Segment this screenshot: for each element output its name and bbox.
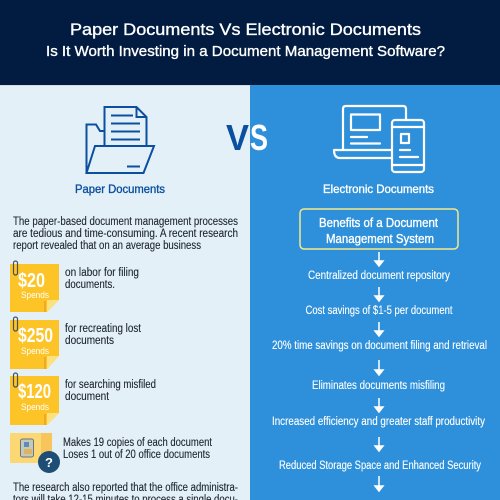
arrow 5 [375,398,383,412]
icon: paperclip [14,261,18,275]
sticky note: $20: Spends [21,290,49,300]
text: searching cost [65,379,156,403]
sticky note: $120: $120 [18,381,51,403]
callout: benefits: Benefits of a Document [319,215,438,230]
callout: benefits: Management System [326,231,434,246]
vs badge [226,117,268,158]
arrow 7 [375,476,383,491]
arrow 4 [375,360,383,375]
heading: paper documents: Paper Documents [75,182,165,196]
title: Paper Documents Vs Electronic Documents [70,20,421,39]
text: labor cost: on labor for filing [65,267,139,279]
callout: benefits [300,209,458,249]
benefit: cost savings: Cost savings of $1-5 per document [306,305,453,317]
sticky note: $20: $20 [18,270,45,292]
text: recreating cost: for recreating lost [65,323,142,335]
icon: document with question mark: ? [45,455,53,470]
vs badge: S [250,117,268,158]
text: recreating cost [65,323,142,347]
benefit: misfiling: Eliminates documents misfiling [312,380,445,392]
icon: document with question mark [10,433,60,473]
header banner [0,0,500,85]
text: copies and losses: Loses 1 out of 20 office documents [63,449,210,461]
arrow 3 [375,322,383,336]
text: recreating cost: documents [65,335,114,347]
panel: paper documents [0,85,250,500]
text: searching cost: document [65,391,110,403]
icon: paperclip [14,373,18,387]
subtitle: Is It Worth Investing in a Document Management Software? [46,43,445,60]
text: labor cost: documents. [65,279,115,291]
intro paragraph: The paper-based document management processes [13,216,238,228]
closing paragraph: The research also reported that the office administra- [13,482,238,494]
sticky note: $120 [10,373,59,425]
icon: paperclip [14,317,18,331]
sticky note: $120: Spends [21,402,49,412]
sticky note: $250 [10,317,59,369]
closing paragraph [13,482,238,500]
panel: electronic documents [250,85,500,500]
intro paragraph: are tedious and time-consuming. A recent research [13,228,238,240]
sticky note: $250: Spends [21,346,49,356]
intro paragraph [13,216,238,252]
benefit: repository: Centralized document repository [308,270,450,282]
arrow 6 [375,437,383,451]
text: copies and losses [63,437,213,461]
vs badge: V [226,117,249,158]
heading: electronic documents: Electronic Documents [323,182,434,196]
sticky note: $250: $250 [18,325,53,347]
text: searching cost: for searching misfiled [65,379,156,391]
text: copies and losses: Makes 19 copies of each document [63,437,213,449]
icon: folder with document [86,107,154,173]
text: labor cost [65,267,139,291]
icon: laptop and phone [334,106,424,172]
arrow 1 [375,252,383,266]
arrow 2 [375,287,383,301]
sticky note: $20 [10,261,59,312]
intro paragraph: report revealed that on an average business [13,240,201,252]
